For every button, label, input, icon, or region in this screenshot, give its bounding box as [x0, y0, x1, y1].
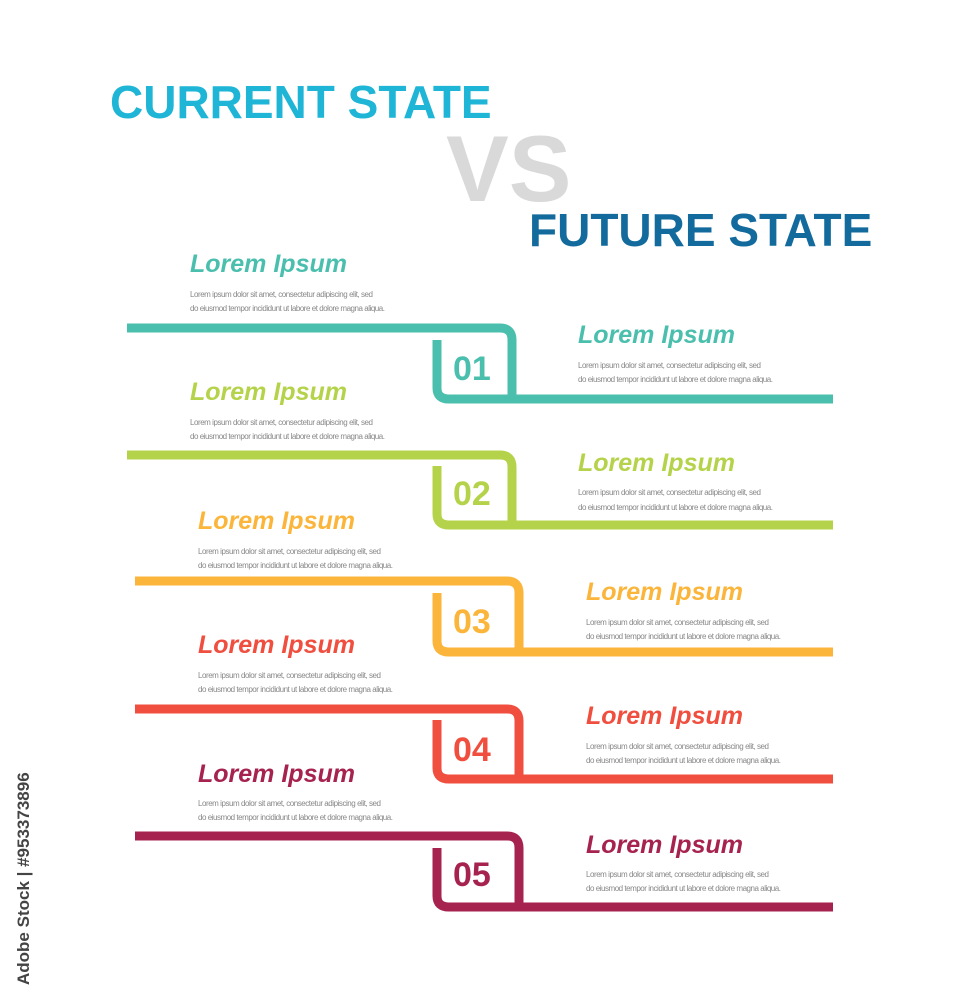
row 1 content: Lorem ipsum dolor sit amet, consectetur adipiscing elit, sed [190, 290, 373, 299]
row 3 content: Lorem Ipsum [198, 507, 355, 535]
row 4 content: 04 [453, 731, 491, 769]
row 5 content: do eiusmod tempor incididunt ut labore et dolore magna aliqua. [198, 813, 393, 822]
row 4 content: Lorem Ipsum [586, 702, 743, 730]
title: vs: VS [446, 116, 571, 221]
row 4 content: do eiusmod tempor incididunt ut labore et dolore magna aliqua. [198, 685, 393, 694]
row 3 [135, 581, 833, 654]
row 1 content: do eiusmod tempor incididunt ut labore et dolore magna aliqua. [578, 375, 773, 384]
title: future state: FUTURE STATE [529, 204, 872, 256]
row 2 content: do eiusmod tempor incididunt ut labore et dolore magna aliqua. [190, 432, 385, 441]
row 5 content: Lorem Ipsum [198, 760, 355, 788]
row 5 content: 05 [453, 856, 491, 894]
title: current state: CURRENT STATE [110, 76, 492, 128]
row 4 [135, 709, 833, 781]
row 3 content: do eiusmod tempor incididunt ut labore et dolore magna aliqua. [586, 632, 781, 641]
row 2 content: 02 [453, 475, 491, 513]
row 2 content: Lorem Ipsum [190, 378, 347, 406]
row 3 content [198, 507, 781, 641]
row 5 content: Lorem Ipsum [586, 831, 743, 859]
row 4 content: do eiusmod tempor incididunt ut labore et dolore magna aliqua. [586, 756, 781, 765]
row 4 content: Lorem ipsum dolor sit amet, consectetur adipiscing elit, sed [198, 671, 381, 680]
row 4 content: Lorem Ipsum [198, 631, 355, 659]
row 1 content: 01 [453, 350, 491, 388]
row 1 content: Lorem Ipsum [190, 250, 347, 278]
row 5 [135, 836, 833, 909]
row 2 content: do eiusmod tempor incididunt ut labore et dolore magna aliqua. [578, 503, 773, 512]
row 3 content: 03 [453, 603, 491, 641]
row 1 content: Lorem ipsum dolor sit amet, consectetur adipiscing elit, sed [578, 361, 761, 370]
row 3 content: Lorem ipsum dolor sit amet, consectetur adipiscing elit, sed [198, 547, 381, 556]
row 5 content [198, 760, 781, 894]
row 1 [127, 328, 833, 401]
row 5 content: do eiusmod tempor incididunt ut labore et dolore magna aliqua. [586, 884, 781, 893]
row 1 content [190, 250, 773, 388]
row 2 content: Lorem ipsum dolor sit amet, consectetur adipiscing elit, sed [190, 418, 373, 427]
row 4 content: Lorem ipsum dolor sit amet, consectetur adipiscing elit, sed [586, 742, 769, 751]
row 3 content: do eiusmod tempor incididunt ut labore et dolore magna aliqua. [198, 561, 393, 570]
row 4 content [198, 631, 781, 769]
row 5 content: Lorem ipsum dolor sit amet, consectetur adipiscing elit, sed [198, 799, 381, 808]
row 2 [127, 455, 833, 527]
watermark credit: Adobe Stock | #953373896 [14, 772, 33, 985]
row 3 content: Lorem ipsum dolor sit amet, consectetur adipiscing elit, sed [586, 618, 769, 627]
row 1 content: Lorem Ipsum [578, 321, 735, 349]
row 5 content: Lorem ipsum dolor sit amet, consectetur adipiscing elit, sed [586, 870, 769, 879]
row 1 content: do eiusmod tempor incididunt ut labore et dolore magna aliqua. [190, 304, 385, 313]
row 2 content: Lorem Ipsum [578, 449, 735, 477]
row 2 content: Lorem ipsum dolor sit amet, consectetur adipiscing elit, sed [578, 488, 761, 497]
row 3 content: Lorem Ipsum [586, 578, 743, 606]
row 2 content [190, 378, 773, 513]
